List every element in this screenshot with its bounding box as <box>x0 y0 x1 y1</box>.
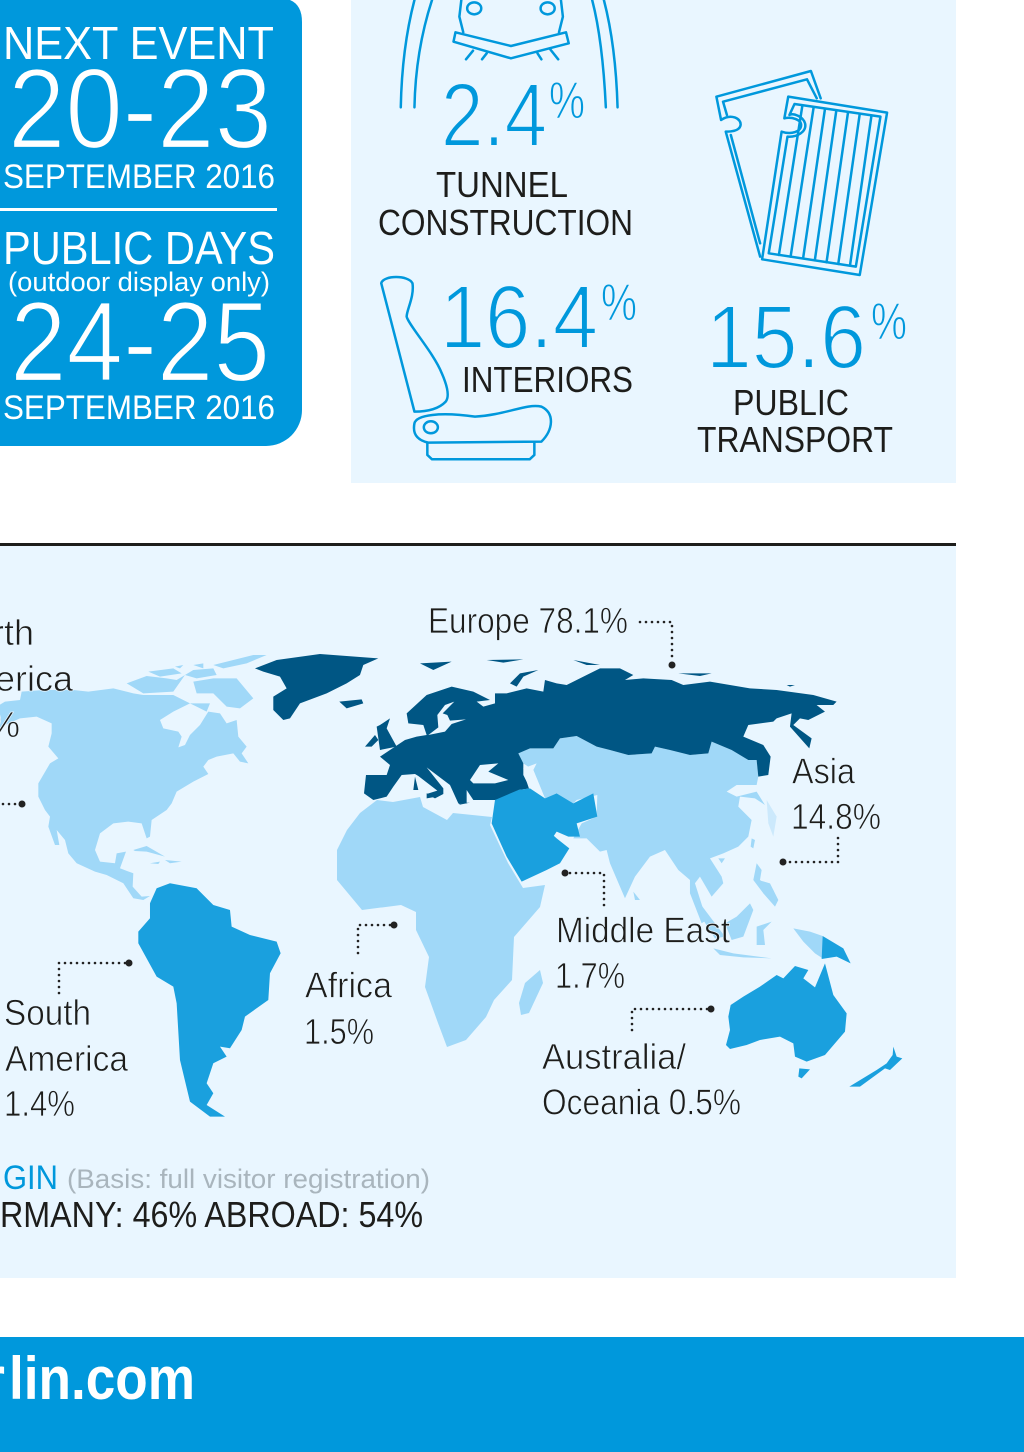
public month: SEPTEMBER 2016 <box>3 389 275 427</box>
label: South America: America <box>5 1038 129 1079</box>
heading: public days: PUBLIC DAYS <box>3 222 275 274</box>
label: Australia and Oceania: Oceania 0.5% <box>542 1082 741 1122</box>
event dates: 20-23 <box>8 46 272 173</box>
label: South America <box>4 960 132 1124</box>
event month: SEPTEMBER 2016 <box>3 158 275 196</box>
map: North America <box>0 655 267 900</box>
stat: tunnel construction percent: 2.4 <box>441 66 547 166</box>
label: tunnel construction: TUNNEL <box>436 164 568 205</box>
text: visitor origin: (Basis: full visitor registration) <box>67 1164 430 1194</box>
panel: event dates <box>0 0 302 446</box>
label: North America <box>0 612 74 808</box>
label: Africa: 1.5% <box>304 1011 374 1052</box>
footer web address: lin.com <box>9 1345 195 1412</box>
label: Australia and Oceania: Australia/ <box>542 1036 686 1077</box>
label: Asia: Asia <box>792 750 856 792</box>
label: interiors: INTERIORS <box>462 359 633 400</box>
label: Middle East: Middle East <box>556 910 730 950</box>
label: tunnel construction <box>378 164 633 243</box>
label: public transport <box>697 382 893 460</box>
icon: tickets <box>716 71 887 275</box>
footer bar <box>0 1337 1024 1452</box>
text: visitor origin <box>0 1159 430 1235</box>
panel: visitor origin map <box>0 543 956 1278</box>
label: tunnel construction: CONSTRUCTION <box>378 202 633 243</box>
label: South America: South <box>4 992 91 1033</box>
label: South America: 1.4% <box>4 1083 75 1124</box>
stat: interiors percent: % <box>601 274 637 332</box>
map: Eurasia and Middle East <box>364 659 837 923</box>
icon: seat <box>381 277 551 459</box>
public dates: 24-25 <box>10 279 270 406</box>
label: public transport: TRANSPORT <box>697 419 893 460</box>
text: visitor origin: GIN <box>3 1159 58 1197</box>
label: public transport: PUBLIC <box>733 382 849 423</box>
label: Africa: Africa <box>305 964 393 1006</box>
label: Australia and Oceania <box>542 1006 741 1122</box>
map: Africa <box>337 797 545 1047</box>
label: Africa <box>304 922 398 1052</box>
label: Asia <box>780 750 881 866</box>
stat: public transport percent: 15.6 <box>706 288 866 388</box>
map: Oceania <box>700 880 902 1087</box>
stat: interiors percent: 16.4 <box>440 268 598 368</box>
label: Asia: 14.8% <box>791 796 881 837</box>
heading: next event: NEXT EVENT <box>3 17 274 69</box>
label: Europe: Europe 78.1% <box>428 600 628 641</box>
icon: tunnel and train <box>401 0 618 107</box>
label: Middle East <box>555 870 730 996</box>
panel: sectors <box>351 0 956 483</box>
text: visitor origin: RMANY: 46% ABROAD: 54% <box>0 1194 423 1235</box>
map: Asian islands <box>633 800 777 900</box>
stat: tunnel construction percent: % <box>549 72 585 130</box>
stat: public transport percent: % <box>871 293 907 351</box>
label: Europe <box>428 600 676 668</box>
map: South America, Greenland, Iceland <box>138 654 378 1117</box>
label: Middle East: 1.7% <box>555 955 625 996</box>
note: outdoor display: (outdoor display only) <box>8 267 270 297</box>
